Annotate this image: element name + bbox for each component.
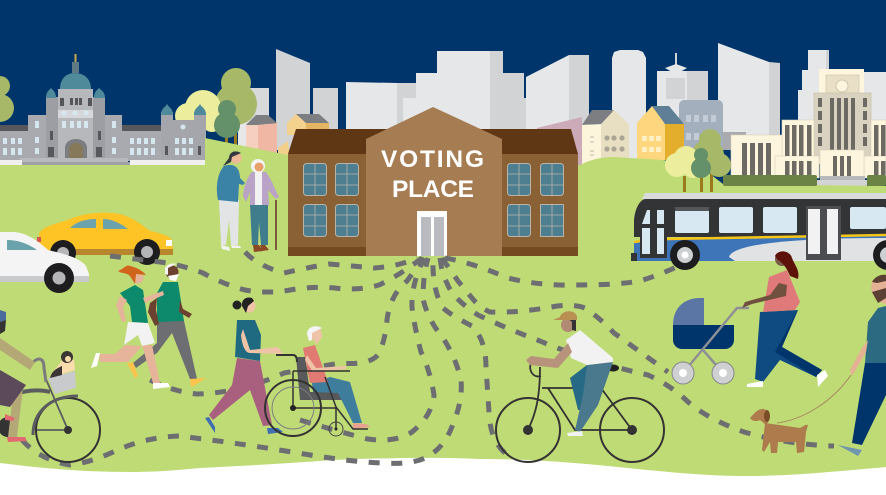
hillside houses [246, 106, 684, 170]
cyclist with dog in basket [0, 310, 100, 462]
city skyline [238, 43, 886, 160]
woman with stroller [672, 251, 828, 387]
building sign: PLACE [392, 176, 474, 203]
background trees left [0, 68, 257, 150]
door [417, 211, 447, 256]
trees by city hall [665, 129, 731, 192]
hedges [723, 175, 886, 186]
voting place building [288, 107, 578, 256]
dog [750, 409, 808, 453]
wheelchair with passenger [265, 326, 370, 436]
leash [777, 375, 851, 423]
bus [631, 193, 886, 270]
building sign [381, 146, 484, 203]
cyclist [496, 311, 664, 462]
white car [0, 232, 89, 293]
night sky background [0, 0, 886, 200]
woman pushing wheelchair [205, 297, 283, 434]
grass field [0, 138, 886, 476]
parliament building [0, 54, 218, 165]
taxi [37, 213, 173, 266]
jogging pair [91, 263, 206, 389]
building sign: VOTING [381, 146, 484, 173]
man walking dog [750, 275, 886, 456]
dashed walking paths [22, 252, 834, 465]
two women at building [217, 151, 279, 252]
stroller [672, 298, 749, 384]
city hall [731, 69, 886, 186]
windows [303, 163, 564, 236]
